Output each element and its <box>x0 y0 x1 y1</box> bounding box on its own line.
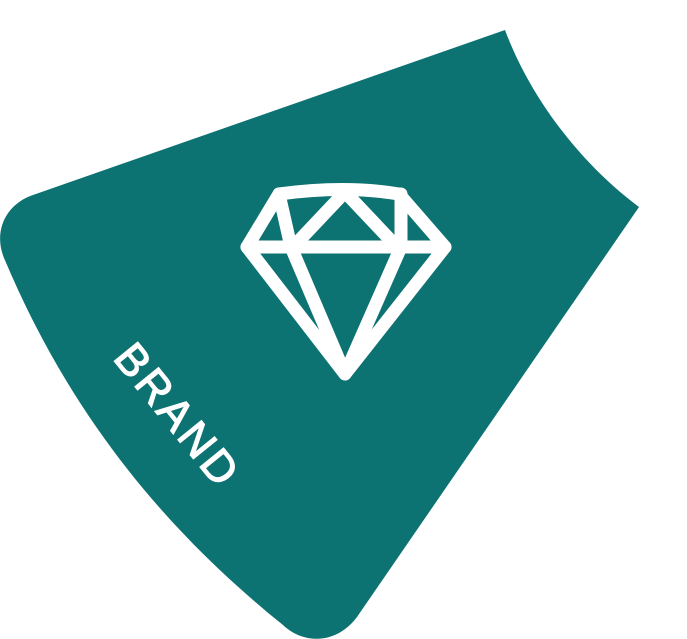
label: BRAND: BRAND <box>104 334 250 498</box>
icon: diamond <box>247 190 445 374</box>
